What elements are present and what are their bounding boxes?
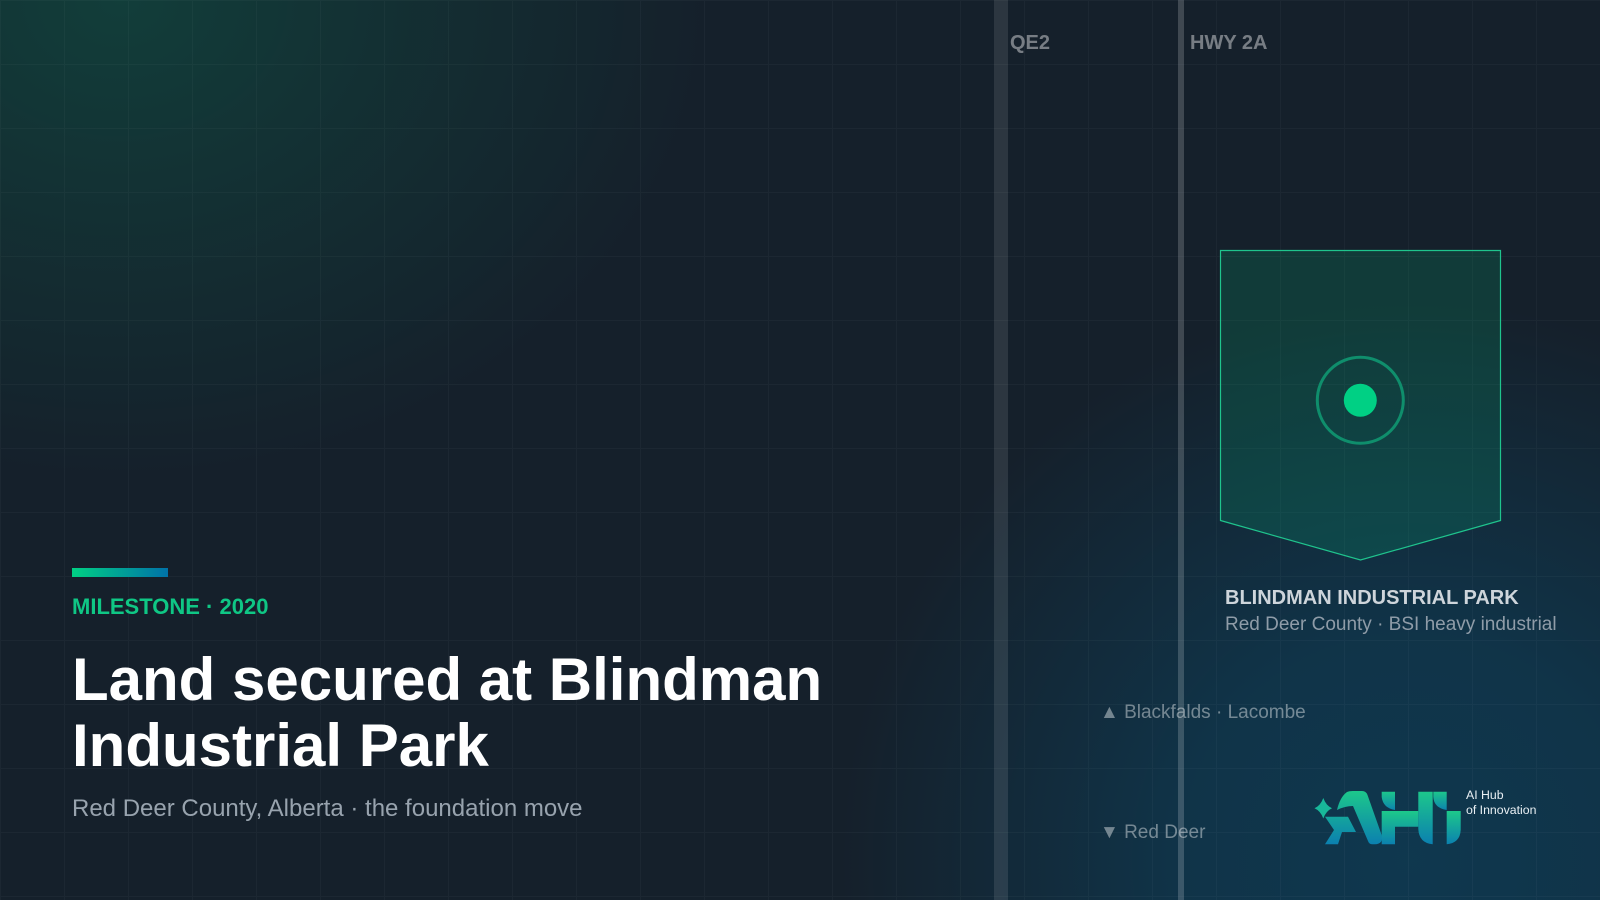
parcel name: BLINDMAN INDUSTRIAL PARK (1225, 587, 1519, 609)
logo wordmark: of Innovation (1466, 803, 1537, 817)
title (72, 646, 822, 779)
parcel shape (1220, 250, 1500, 560)
road: QE2 (994, 0, 1008, 900)
road label: QE2: QE2 (1010, 32, 1050, 54)
site dot (1344, 384, 1377, 417)
parcel marker (1220, 250, 1500, 560)
eyebrow: MILESTONE · 2020 (72, 594, 268, 619)
parcel detail: Red Deer County · BSI heavy industrial (1225, 614, 1557, 635)
logo wordmark: AI Hub (1466, 788, 1504, 802)
direction label: north: ▲ Blackfalds · Lacombe (1100, 702, 1306, 723)
road: HWY 2A (1178, 0, 1184, 900)
accent bar (72, 568, 168, 577)
site ring (1317, 357, 1403, 443)
logo (1314, 788, 1537, 844)
title: Industrial Park (72, 712, 489, 779)
parcel label (1225, 587, 1557, 635)
subtitle: Red Deer County, Alberta · the foundation move (72, 795, 583, 822)
title: Land secured at Blindman (72, 646, 822, 713)
logo mark (1314, 791, 1461, 844)
direction label: south: ▼ Red Deer (1100, 822, 1206, 843)
road label: HWY 2A: HWY 2A (1190, 32, 1267, 54)
logo wordmark (1466, 788, 1537, 817)
